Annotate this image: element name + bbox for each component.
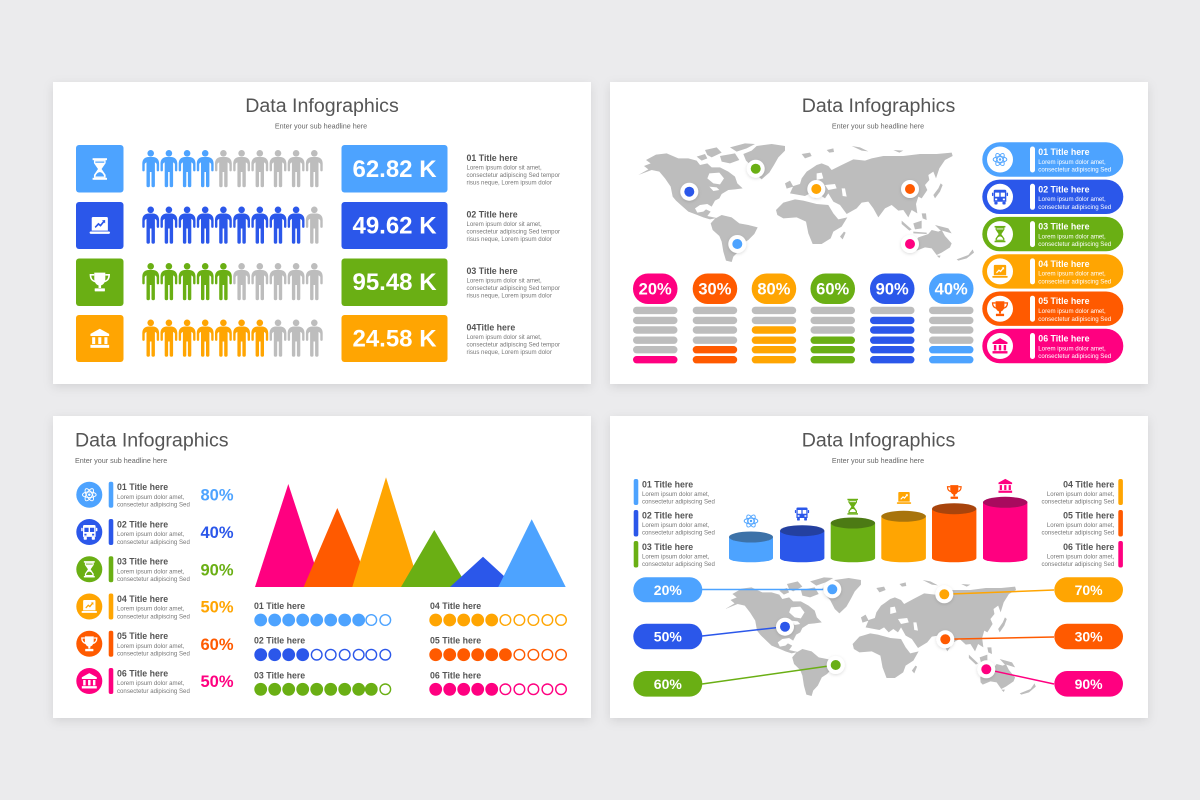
- text block 04: Lorem ipsum dolor sit amet,: [466, 334, 542, 341]
- pill 02 bus: 02 Title here: [1038, 184, 1090, 194]
- pill 04 laptop: 04 Title here: [1038, 259, 1090, 269]
- pill 01 atom: consectetur adipiscing Sed: [1038, 167, 1111, 174]
- title: Data Infographics: [245, 95, 399, 117]
- left text 01: [634, 479, 715, 505]
- pill 01 atom: Lorem ipsum dolor amet,: [1038, 159, 1106, 166]
- list item 02: Lorem ipsum dolor amet,: [117, 531, 185, 538]
- stacked column 60%: [810, 274, 855, 363]
- right text 04: 04 Title here: [1063, 480, 1114, 490]
- dot rating 05: [430, 636, 566, 661]
- badge 20%: 20%: [654, 582, 682, 598]
- cylinder 2 with bus icon: [780, 508, 824, 562]
- pill 04 laptop: [982, 254, 1123, 289]
- panel: triangle chart and dot ratings: [53, 416, 591, 718]
- text block 04: risus neque, Lorem ipsum dolor: [466, 349, 552, 356]
- list item 05: consectetur adipiscing Sed: [117, 651, 190, 658]
- badge 60%: 60%: [654, 676, 682, 692]
- list item 03: [76, 556, 234, 583]
- title: Data Infographics: [802, 430, 955, 452]
- subtitle: Enter your sub headline here: [832, 121, 924, 130]
- value box 95.48 K: [342, 258, 448, 306]
- pill 05 trophy: [982, 292, 1123, 326]
- value box 62.82 K: 62.82 K: [352, 156, 437, 183]
- dot rating 02: [254, 636, 391, 661]
- pill 03 hourglass: 03 Title here: [1038, 222, 1090, 232]
- text block 02: Lorem ipsum dolor sit amet,: [466, 221, 542, 228]
- text block 03: risus neque, Lorem ipsum dolor: [466, 292, 552, 300]
- text block 03: consectetur adipiscing Sed tempor: [466, 285, 560, 292]
- triangle chart: [255, 477, 566, 587]
- dot rating 01: [254, 601, 391, 626]
- stacked column 30%: [693, 274, 737, 363]
- dot rating 02: 02 Title here: [254, 636, 305, 646]
- list item 01: Lorem ipsum dolor amet,: [117, 494, 185, 501]
- text block 01: Lorem ipsum dolor sit amet,: [466, 164, 542, 172]
- stacked column 20%: 20%: [639, 280, 672, 298]
- left text 01: Lorem ipsum dolor amet,: [642, 491, 710, 498]
- badge 50%: [633, 624, 702, 649]
- value box 24.58 K: [342, 315, 448, 362]
- pictogram row 4: 7 of 10: [142, 320, 323, 357]
- stacked column 90%: 90%: [876, 280, 909, 298]
- icon tile: trophy: [76, 258, 124, 306]
- list item 06: [76, 668, 234, 695]
- dot rating 05: 05 Title here: [430, 636, 481, 646]
- list item 06: 50%: [200, 673, 234, 691]
- stacked column 30%: 30%: [698, 280, 732, 298]
- badge 50%: 50%: [654, 628, 682, 644]
- value box 95.48 K: 95.48 K: [352, 269, 437, 296]
- stacked column 20%: [633, 274, 678, 363]
- dot rating 06: [430, 670, 566, 695]
- list item 01: [76, 482, 234, 509]
- pill 06 bank: Lorem ipsum dolor amet,: [1038, 345, 1106, 352]
- list item 06: 06 Title here: [117, 668, 168, 678]
- text block 01: consectetur adipiscing Sed tempor: [466, 172, 560, 179]
- list item 03: Lorem ipsum dolor amet,: [117, 568, 185, 575]
- badge 70%: 70%: [1075, 582, 1103, 598]
- title: Data Infographics: [802, 95, 955, 117]
- stacked column 80%: [752, 274, 796, 363]
- stacked column 40%: 40%: [935, 280, 968, 298]
- text block 02: 02 Title here: [466, 210, 518, 220]
- pill 06 bank: 06 Title here: [1038, 334, 1090, 344]
- list item 06: consectetur adipiscing Sed: [117, 688, 190, 695]
- dot rating 03: 03 Title here: [254, 670, 305, 680]
- text block 03: 03 Title here: [466, 266, 518, 276]
- pill 03 hourglass: Lorem ipsum dolor amet,: [1038, 233, 1106, 240]
- list item 02: 40%: [200, 524, 234, 542]
- subtitle: Enter your sub headline here: [832, 456, 924, 465]
- pill 02 bus: Lorem ipsum dolor amet,: [1038, 196, 1106, 203]
- stacked column 60%: 60%: [816, 280, 850, 298]
- list item 01: 80%: [200, 487, 234, 505]
- list item 01: consectetur adipiscing Sed: [117, 502, 190, 509]
- list item 03: 90%: [200, 561, 234, 579]
- pill 01 atom: 01 Title here: [1038, 147, 1090, 157]
- dot rating 03: [254, 670, 391, 695]
- pill 06 bank: consectetur adipiscing Sed: [1038, 353, 1111, 360]
- pill 03 hourglass: consectetur adipiscing Sed: [1038, 241, 1111, 248]
- pictogram row 3: 5 of 10: [142, 263, 323, 300]
- text block 03: Lorem ipsum dolor sit amet,: [466, 278, 542, 284]
- right text 05: consectetur adipiscing Sed: [1041, 530, 1114, 537]
- list item 04: consectetur adipiscing Sed: [117, 613, 190, 620]
- left text 01: consectetur adipiscing Sed: [642, 498, 715, 505]
- pill 02 bus: consectetur adipiscing Sed: [1038, 204, 1111, 211]
- list item 03: consectetur adipiscing Sed: [117, 576, 190, 583]
- list item 05: Lorem ipsum dolor amet,: [117, 643, 185, 650]
- pill 03 hourglass: [982, 217, 1123, 251]
- icon tile: bank: [76, 315, 124, 362]
- right text 05: [1041, 510, 1123, 537]
- badge 30%: 30%: [1075, 628, 1103, 644]
- list item 04: 04 Title here: [117, 594, 168, 604]
- list item 02: 02 Title here: [117, 519, 168, 529]
- cylinder 5 with trophy icon: [932, 485, 976, 562]
- pill 05 trophy: consectetur adipiscing Sed: [1038, 316, 1111, 323]
- left text 02: [634, 510, 715, 537]
- dot rating 04: 04 Title here: [430, 601, 481, 611]
- badge 70%: [1054, 577, 1123, 602]
- map pins: [680, 160, 919, 253]
- list item 04: 50%: [200, 598, 234, 616]
- left text 03: 03 Title here: [642, 542, 693, 552]
- left text 03: Lorem ipsum dolor amet,: [642, 554, 710, 560]
- list item 01: 01 Title here: [117, 482, 168, 492]
- connector lines: [702, 590, 1054, 684]
- badge 60%: [633, 671, 702, 697]
- right text 05: 05 Title here: [1063, 510, 1114, 520]
- value box 49.62 K: 49.62 K: [352, 212, 437, 240]
- badge 90%: [1054, 671, 1123, 697]
- panel: world map with stacked percentages: [610, 82, 1148, 384]
- list item 04: [76, 594, 234, 620]
- left text 02: consectetur adipiscing Sed: [642, 530, 715, 537]
- pill 06 bank: [982, 329, 1123, 363]
- left text 03: [634, 541, 715, 568]
- text block 01: 01 Title here: [466, 153, 518, 163]
- text block 01: risus neque, Lorem ipsum dolor: [466, 180, 552, 186]
- world map: [638, 143, 974, 262]
- text block 01: [466, 153, 560, 186]
- left text 03: consectetur adipiscing Sed: [642, 561, 715, 568]
- value box 49.62 K: [342, 202, 448, 249]
- pill 04 laptop: consectetur adipiscing Sed: [1038, 278, 1111, 286]
- dot rating 06: 06 Title here: [430, 670, 481, 680]
- pill 05 trophy: 05 Title here: [1038, 296, 1090, 306]
- pictogram row 2: 9 of 10: [142, 206, 323, 244]
- right text 04: Lorem ipsum dolor amet,: [1047, 491, 1115, 498]
- pill 01 atom: [982, 142, 1123, 177]
- badge 90%: 90%: [1075, 676, 1103, 692]
- badge 20%: [633, 577, 702, 602]
- text block 02: consectetur adipiscing Sed tempor: [466, 228, 560, 236]
- pill 02 bus: [982, 180, 1123, 214]
- stacked column 90%: [870, 274, 914, 363]
- right text 04: [1041, 479, 1123, 505]
- cylinder 4 with laptop icon: [881, 492, 926, 562]
- text block 04: 04Title here: [466, 322, 515, 332]
- title: Data Infographics: [75, 430, 229, 452]
- pictogram row 1: 4 of 10: [142, 150, 323, 187]
- list item 04: Lorem ipsum dolor amet,: [117, 606, 185, 613]
- panel: people pictogram rows: [53, 82, 591, 384]
- text block 04: [466, 322, 560, 356]
- subtitle: Enter your sub headline here: [275, 121, 367, 130]
- value box 62.82 K: [342, 145, 448, 192]
- stacked column 80%: 80%: [757, 280, 791, 298]
- cylinder 3 with hourglass icon: [831, 499, 875, 562]
- dot rating 01: 01 Title here: [254, 601, 305, 611]
- right text 06: [1041, 541, 1123, 568]
- text block 02: risus neque, Lorem ipsum dolor: [466, 236, 552, 243]
- list item 05: 05 Title here: [117, 631, 168, 641]
- cylinder 6 with bank icon: [983, 479, 1027, 562]
- right text 04: consectetur adipiscing Sed: [1041, 498, 1114, 505]
- cylinder 1 with atom icon: [729, 514, 773, 562]
- value box 24.58 K: 24.58 K: [352, 326, 437, 352]
- text block 04: consectetur adipiscing Sed tempor: [466, 342, 560, 348]
- right text 06: 06 Title here: [1063, 542, 1114, 552]
- map pins: [776, 580, 995, 678]
- icon tile: laptop chart: [76, 202, 124, 249]
- icon tile: hourglass: [76, 145, 124, 192]
- text block 02: [466, 210, 560, 243]
- panel: cylinders and connected world map: [610, 416, 1148, 718]
- badge 30%: [1054, 624, 1123, 649]
- stacked column 40%: [929, 274, 974, 363]
- list item 03: 03 Title here: [117, 557, 168, 567]
- world map: [725, 577, 1036, 696]
- list item 02: consectetur adipiscing Sed: [117, 539, 190, 546]
- right text 06: consectetur adipiscing Sed: [1041, 561, 1114, 568]
- list item 05: 60%: [200, 636, 234, 654]
- list item 02: [76, 519, 234, 546]
- left text 02: Lorem ipsum dolor amet,: [642, 522, 710, 529]
- list item 05: [76, 631, 234, 658]
- pill 05 trophy: Lorem ipsum dolor amet,: [1038, 308, 1106, 315]
- left text 02: 02 Title here: [642, 510, 693, 520]
- right text 05: Lorem ipsum dolor amet,: [1047, 522, 1115, 529]
- right text 06: Lorem ipsum dolor amet,: [1047, 554, 1115, 560]
- left text 01: 01 Title here: [642, 480, 693, 490]
- text block 03: [466, 266, 560, 300]
- pill 04 laptop: Lorem ipsum dolor amet,: [1038, 271, 1106, 278]
- list item 06: Lorem ipsum dolor amet,: [117, 680, 185, 687]
- subtitle: Enter your sub headline here: [75, 456, 167, 465]
- dot rating 04: [430, 601, 566, 626]
